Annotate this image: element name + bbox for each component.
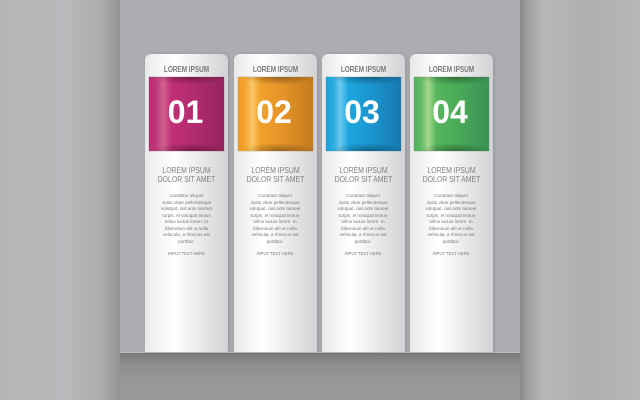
card 3 subtitle [334, 166, 392, 184]
card 1 body text: bibendum alit ut nulla [165, 226, 208, 230]
card 1 [145, 54, 228, 352]
card 4 subtitle: LOREM IPSUM [427, 166, 475, 175]
card 3 body text: tellus luctus lorem. In [341, 219, 385, 224]
card 4 body text: Curabitur aliquet [434, 193, 468, 198]
card 3 heading: LOREM IPSUM [340, 65, 386, 74]
card 4 body text: volutpat, nisl ante laoreet [425, 206, 477, 211]
card 2 [234, 54, 316, 352]
card 4 [410, 54, 492, 352]
card 1 body text: porttitor. [178, 238, 195, 244]
card 4 body text: Justo vitae pellentesque [426, 200, 476, 204]
card 1 colour square [149, 77, 224, 151]
card 4 body text: bibendum alit ut nulla [429, 226, 473, 230]
card 2 body text: tellus luctus lorem. In [253, 219, 297, 224]
card 3 body text: bibendum alit ut nulla [341, 226, 385, 230]
card 2 colour square [238, 77, 312, 151]
card 3 body text: turpis, et volutpat lectus [339, 212, 387, 218]
card 4 body text: porttitor. [443, 238, 459, 244]
card 2 body text: volutpat, nisl ante laoreet [249, 206, 301, 211]
card 3 body text: vehicula, a rhoncus est [340, 232, 386, 237]
card 3 colour square [326, 77, 400, 151]
card 1 input text: INPUT TEXT HERE [168, 251, 205, 256]
card 3 body text: Curabitur aliquet [346, 193, 380, 198]
card 4 colour square [414, 77, 488, 151]
card 1 body text: vehicula, a rhoncus est [163, 232, 210, 237]
card 2 number: 02 [256, 94, 292, 130]
card 4 input text: INPUT TEXT HERE [432, 251, 470, 256]
card 4 subtitle: DOLOR SIT AMET [422, 174, 480, 184]
card 1 subtitle [158, 166, 216, 184]
card 4 body text: vehicula, a rhoncus est [428, 232, 474, 237]
card 4 body text: tellus luctus lorem. In [429, 219, 473, 224]
card 1 body text: Curabitur aliquet [170, 193, 203, 198]
card 3 body text: Justo vitae pellentesque [338, 200, 388, 204]
card 1 subtitle: DOLOR SIT AMET [158, 174, 215, 184]
card 3 body text [337, 193, 389, 244]
card 1 body text [161, 193, 212, 244]
card 2 body text: porttitor. [267, 238, 283, 244]
card 2 body text [249, 193, 301, 244]
card 4 heading: LOREM IPSUM [428, 65, 474, 74]
card 2 body text: turpis, et volutpat lectus [251, 212, 299, 218]
center panel [120, 0, 520, 352]
card 3 body text: porttitor. [355, 238, 371, 244]
card 3 number: 03 [344, 94, 380, 130]
card 2 subtitle: LOREM IPSUM [251, 166, 299, 175]
card 2 subtitle [246, 166, 304, 184]
left wall background [0, 0, 120, 400]
card 3 input text: INPUT TEXT HERE [344, 251, 382, 256]
card 4 body text [425, 193, 477, 244]
card 4 body text: turpis, et volutpat lectus [427, 212, 475, 218]
card 1 heading: LOREM IPSUM [164, 65, 209, 74]
card 3 subtitle: LOREM IPSUM [339, 166, 387, 175]
card 2 body text: Curabitur aliquet [258, 193, 292, 198]
card 2 body text: bibendum alit ut nulla [253, 226, 297, 230]
card 1 body text: volutpat, nisl ante laoreet [161, 206, 212, 211]
card 2 heading: LOREM IPSUM [252, 65, 298, 74]
right wall background [520, 0, 640, 400]
card 2 body text: Justo vitae pellentesque [250, 200, 300, 204]
card 2 subtitle: DOLOR SIT AMET [246, 174, 304, 184]
card 2 body text: vehicula, a rhoncus est [252, 232, 298, 237]
card 1 subtitle: LOREM IPSUM [162, 166, 211, 175]
card 1 body text: tellus luctus lorem. In [165, 219, 208, 224]
card 4 subtitle [422, 166, 480, 184]
floor shelf [120, 352, 520, 400]
card 1 body text: Justo vitae pellentesque [162, 200, 211, 204]
card 3 subtitle: DOLOR SIT AMET [334, 174, 392, 184]
card 1 body text: turpis, et volutpat lectus [162, 212, 211, 218]
card 3 [322, 54, 404, 352]
card 2 input text: INPUT TEXT HERE [256, 251, 294, 256]
card 1 number: 01 [168, 94, 203, 130]
card 4 number: 04 [432, 94, 468, 130]
card 3 body text: volutpat, nisl ante laoreet [337, 206, 389, 211]
